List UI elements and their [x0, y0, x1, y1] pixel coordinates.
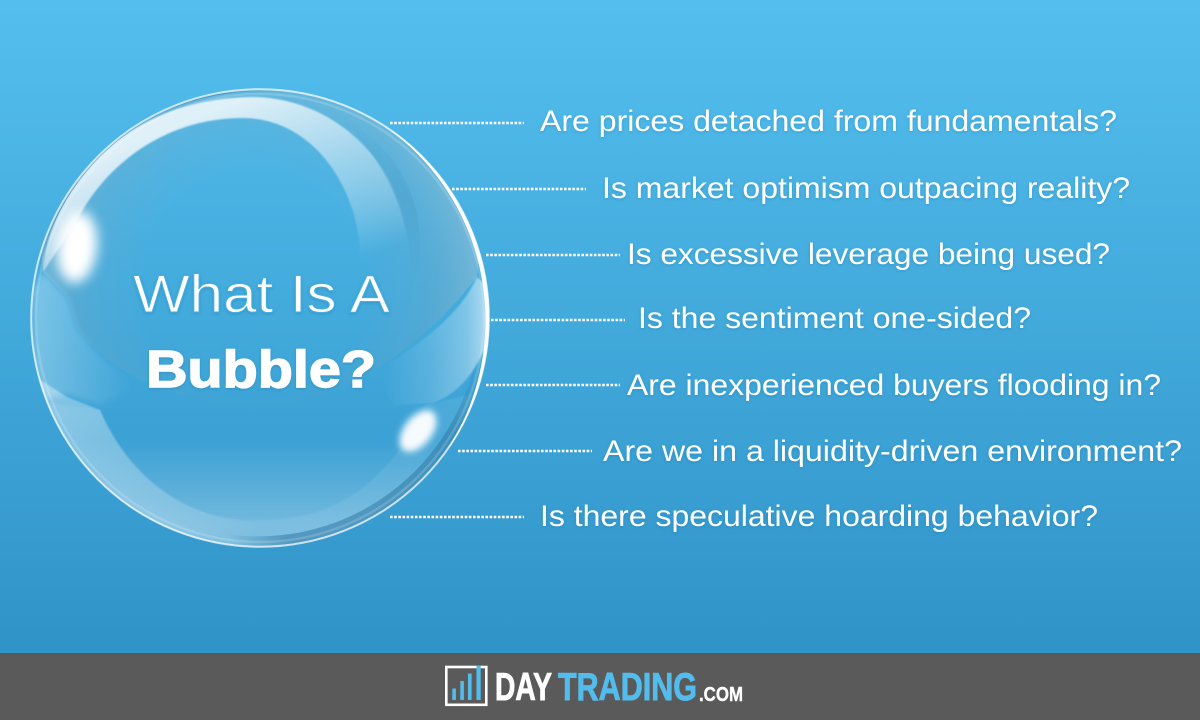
bubble right rim thick	[392, 131, 489, 446]
logo icon: bar chart in frame	[446, 666, 486, 705]
bubble inner ring line	[36, 94, 484, 542]
title line 1: What Is A	[133, 265, 391, 324]
question 4: Is the sentiment one-sided?	[638, 302, 1031, 335]
bubble bottom interior fade	[80, 452, 432, 547]
bubble left glow	[32, 272, 116, 404]
footer logo	[446, 666, 743, 709]
question 2: Is market optimism outpacing reality?	[602, 172, 1130, 205]
connector 4	[491, 319, 625, 321]
connector 2	[452, 188, 586, 190]
bubble upper bowl shading	[42, 90, 478, 383]
bubble top crescent highlight	[42, 96, 404, 272]
highlight right	[392, 403, 444, 459]
bubble dark rim	[30, 88, 490, 548]
dotted connector lines	[390, 123, 625, 517]
logo word DAY: DAY	[495, 666, 552, 709]
logo word TRADING: TRADING	[558, 666, 697, 709]
connector 3	[486, 254, 620, 256]
question 1: Are prices detached from fundamentals?	[540, 105, 1117, 138]
question list	[540, 105, 1182, 533]
connector 5	[486, 384, 620, 386]
title	[133, 265, 391, 399]
question 6: Are we in a liquidity-driven environment?	[603, 435, 1182, 468]
bubble dark band	[379, 165, 412, 208]
connector 1	[390, 122, 524, 124]
question 7: Is there speculative hoarding behavior?	[540, 500, 1098, 533]
bubble lower ring	[49, 394, 474, 546]
question 5: Are inexperienced buyers flooding in?	[627, 369, 1161, 402]
connector 6	[458, 450, 592, 452]
question 3: Is excessive leverage being used?	[627, 238, 1110, 271]
bubble right light band	[400, 276, 486, 404]
bubble illustration	[30, 80, 490, 560]
title line 2: Bubble?	[146, 341, 376, 399]
highlight left	[53, 209, 101, 285]
bubble lower left crescent	[40, 379, 218, 538]
connector 7	[390, 516, 524, 518]
footer bar	[0, 653, 1200, 720]
bubble outline	[31, 89, 489, 547]
logo suffix .COM: .COM	[699, 684, 743, 706]
